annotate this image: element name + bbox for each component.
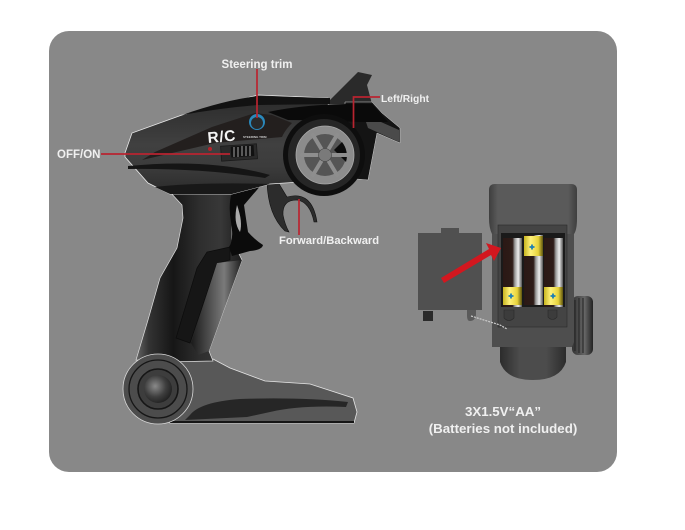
red arrow <box>441 243 501 283</box>
compartment hinges <box>504 310 557 320</box>
main body <box>492 215 574 347</box>
battery bay <box>501 233 565 307</box>
foot dial <box>123 354 193 424</box>
label: forward backward: Forward/Backward <box>279 235 379 247</box>
battery cover lid <box>418 233 482 310</box>
head body <box>125 95 345 194</box>
steering trim knob <box>249 114 265 130</box>
finger hollow <box>229 184 263 256</box>
battery compartment <box>498 225 567 327</box>
foot base <box>165 356 357 423</box>
battery caption <box>429 404 577 436</box>
label: steering trim: Steering trim <box>222 59 292 71</box>
top handle <box>489 184 577 234</box>
lid tab <box>441 228 459 234</box>
fin <box>328 72 372 104</box>
logo tagline: STEERING TRIM <box>243 135 267 139</box>
battery 3 <box>544 238 563 307</box>
lid cord <box>471 316 507 329</box>
transmitter rear view <box>418 184 593 380</box>
transmitter controller <box>123 72 400 424</box>
battery type: 3X1.5V“AA” <box>465 404 541 419</box>
power switch <box>221 144 258 161</box>
grip <box>136 192 242 362</box>
callout lines <box>101 69 380 235</box>
chin shadow <box>155 183 270 194</box>
battery 2 <box>524 235 543 305</box>
side knob <box>572 296 593 355</box>
battery note: (Batteries not included) <box>429 421 577 436</box>
finger hollow highlight <box>236 205 241 232</box>
steering wheel <box>283 114 365 196</box>
lid eyelet <box>467 310 476 321</box>
upper gloss band <box>268 104 388 122</box>
top cover <box>182 96 330 115</box>
lid latch <box>423 311 433 321</box>
R/C logo: R/C <box>207 128 237 147</box>
background panel <box>49 31 617 472</box>
label: off on: OFF/ON <box>57 149 100 161</box>
trigger <box>267 182 317 232</box>
grip inset strip <box>176 247 230 343</box>
rear wing <box>345 102 400 180</box>
indicator LED <box>208 147 212 151</box>
lower dark band <box>128 163 270 178</box>
lower housing <box>500 345 566 380</box>
carbon strip <box>142 113 292 160</box>
label: left right: Left/Right <box>381 94 430 105</box>
wing highlight <box>366 122 399 142</box>
grip inset panel <box>191 260 242 355</box>
battery 1 <box>503 238 522 307</box>
